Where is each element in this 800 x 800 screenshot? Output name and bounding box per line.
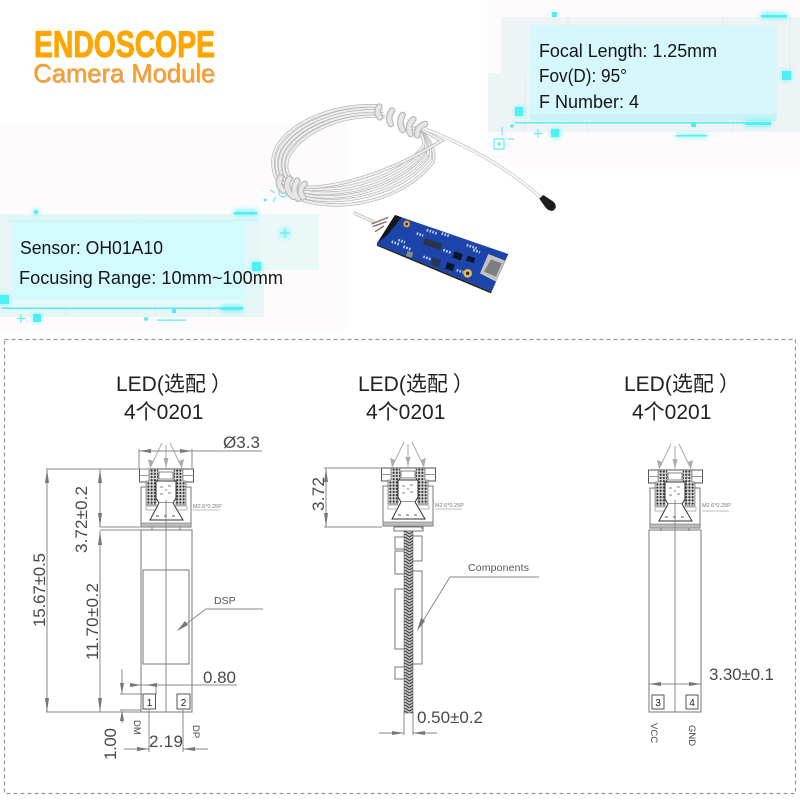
lens cross section 1: M2.6*0.25P — [193, 504, 222, 510]
pin labels DM DP — [131, 720, 201, 738]
pin labels DM DP: DM — [131, 720, 142, 735]
panel: lens specifications — [488, 12, 800, 149]
pin labels VCC GND: GND — [686, 725, 697, 746]
drawing 3: bottom view with pads — [624, 373, 774, 746]
panel: pale background behind sensor specs — [0, 122, 347, 330]
sensor panel glow accents — [0, 189, 290, 323]
dimension: board width 3.30 — [649, 665, 774, 686]
pin labels VCC GND: VCC — [648, 723, 659, 743]
LED heading 1: 4个0201 — [124, 401, 203, 424]
LED heading 1 — [116, 373, 232, 424]
dimension: diameter 3.3 — [139, 433, 262, 469]
title: Camera Module — [33, 58, 215, 88]
LED heading 2: LED(选配） — [358, 373, 474, 396]
LED heading 3: 4个0201 — [632, 401, 711, 424]
white cable coil — [273, 106, 442, 223]
PCB outline with pads: 1 — [147, 698, 153, 709]
dimension: pad offset 0.80: 0.80 — [203, 668, 236, 687]
sensor spec text: Focusing Range: 10mm~100mm — [19, 268, 283, 288]
dimension: pad height 1.00 — [101, 669, 143, 760]
blue PCB board — [377, 215, 508, 293]
lens spec text: Focal Length: 1.25mm — [539, 41, 717, 61]
lens cross section 2: M2.6*0.25P — [435, 503, 464, 509]
lens cross section 3: M2.6*0.25P — [702, 503, 731, 509]
dimension: diameter 3.3: Ø3.3 — [223, 433, 260, 452]
PCB outline with pads 3 and 4: 4 — [689, 698, 695, 709]
components callout — [417, 562, 539, 631]
cable tail with camera tip — [423, 128, 556, 211]
dimension: pad spacing 2.19: 2.19 — [149, 732, 183, 751]
lens cross section 1 — [140, 443, 222, 530]
dimension: overall length 15.67 — [30, 469, 150, 712]
dimension: overall length 15.67: 15.67±0.5 — [30, 553, 49, 627]
PCB outline with pads: 2 — [181, 698, 187, 709]
LED heading 1: LED(选配） — [116, 373, 232, 396]
PCB outline with pads 3 and 4 — [649, 500, 701, 712]
title: Camera Module — [34, 59, 216, 89]
dimension: board width 3.30: 3.30±0.1 — [709, 665, 774, 684]
micro USB connector — [480, 254, 505, 282]
PCB side profile with components — [394, 527, 423, 713]
DSP callout: DSP — [214, 595, 236, 607]
lens spec text: F Number: 4 — [539, 92, 639, 112]
product photo: endoscope camera with cable and PCB — [273, 106, 556, 293]
LED heading 3: LED(选配） — [624, 373, 740, 396]
dimension: lens height 3.72 — [72, 469, 141, 712]
lens spec text: Fov(D): 95° — [539, 66, 627, 86]
drawing 1: top view with DSP — [30, 373, 263, 760]
dimension: pad offset 0.80 — [130, 668, 237, 695]
wires — [372, 217, 388, 232]
lens cross section 3 — [648, 444, 731, 531]
dimension: 3.72 — [309, 468, 382, 527]
dimension: board thickness 0.50 — [379, 708, 483, 735]
title: ENDOSCOPE — [34, 24, 215, 65]
title — [33, 24, 216, 89]
dimension: board length 11.70: 11.70±0.2 — [83, 583, 102, 660]
dimension: pad height 1.00: 1.00 — [101, 728, 120, 760]
lens spec text — [539, 41, 717, 112]
PCB outline with pads — [141, 500, 192, 712]
panel: dimension drawings frame — [4, 340, 796, 794]
LED heading 2: 4个0201 — [366, 401, 445, 424]
dimension: board thickness 0.50: 0.50±0.2 — [417, 708, 483, 727]
sensor spec text: Sensor: OH01A10 — [20, 238, 163, 258]
lens panel glow accents — [494, 12, 791, 149]
pin labels DM DP: DP — [190, 725, 201, 738]
panel: sensor specifications — [0, 189, 319, 323]
DSP callout — [177, 595, 263, 631]
dimension: 3.72: 3.72 — [309, 477, 328, 511]
sensor spec text — [19, 238, 283, 288]
LED heading 2 — [358, 373, 474, 424]
panel: pale background behind lens specs — [487, 0, 800, 168]
PCB outline with pads 3 and 4: 3 — [655, 698, 661, 709]
LED heading 3 — [624, 373, 740, 424]
drawing 2: side view with components — [309, 373, 539, 735]
dimension: pad spacing 2.19 — [124, 709, 208, 752]
components callout: Components — [468, 562, 529, 574]
pin labels VCC GND — [648, 723, 697, 746]
dimension: lens height 3.72: 3.72±0.2 — [72, 486, 91, 553]
lens cross section 2 — [382, 442, 464, 529]
